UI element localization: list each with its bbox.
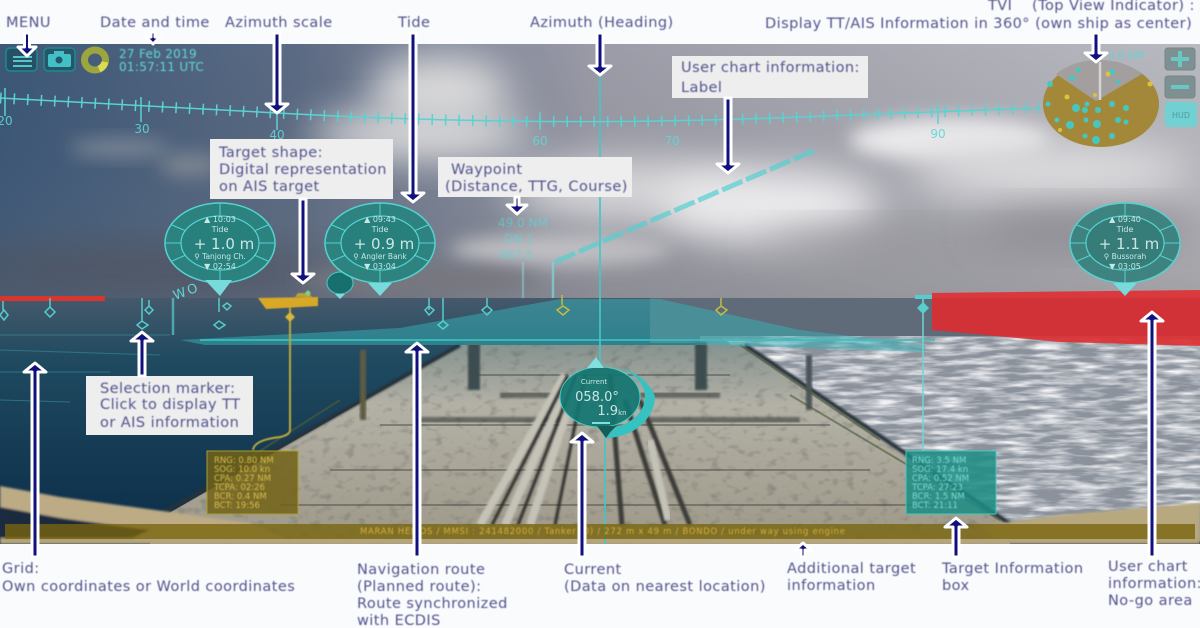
- tide gauge 1: ▼ 02:54: [204, 262, 236, 271]
- AIS target: yellow ship shape: [253, 290, 318, 450]
- text: additional target information: [787, 561, 916, 594]
- heading: azimuth heading: Azimuth (Heading): [530, 15, 674, 31]
- arrow: azimuth scale: [266, 33, 288, 113]
- heading: tide: Tide: [397, 15, 430, 31]
- scale numbers: 30: [134, 122, 150, 136]
- callout box: user chart label: Label: [681, 80, 722, 96]
- text: target information box: Target Information: [941, 561, 1084, 577]
- bridge window rails: [0, 486, 1200, 544]
- arrow: navigation route: [406, 343, 428, 557]
- teal target information box: BCR: 1.5 NM: [912, 492, 965, 502]
- world route label: WO: [171, 280, 202, 304]
- callout box: user chart label: [672, 56, 868, 98]
- sky with clouds: [0, 44, 1200, 300]
- current gauge: Current: [581, 378, 607, 386]
- text: current: (Data on nearest location): [564, 579, 766, 595]
- date and time readout: 01:57:11 UTC: [119, 60, 204, 74]
- text: user chart information no-go area: information:: [1108, 576, 1200, 592]
- gold target information box: CPA: 0.27 NM: [214, 474, 271, 484]
- arrow: menu: [18, 33, 36, 56]
- arrow: target shape: [292, 199, 314, 283]
- status donut icon: [84, 50, 106, 70]
- top view indicator (TVI): 3.0 NM: [1108, 50, 1145, 62]
- text: user chart information no-go area: No-go area: [1108, 593, 1193, 609]
- scale numbers: 40: [269, 128, 285, 142]
- callout box: selection marker: [86, 376, 253, 435]
- no-go area left: [0, 296, 105, 301]
- arrow: current: [571, 433, 593, 557]
- date and time readout: [119, 47, 204, 74]
- tide gauge 2: ▲ 09:43: [364, 215, 396, 224]
- text: target information box: box: [942, 578, 970, 594]
- route line to waypoint: [555, 150, 815, 262]
- waypoint readout: 49.0 NM: [498, 216, 548, 230]
- tide gauge 3: Tide: [1116, 225, 1134, 234]
- arrow: user chart label: [717, 98, 739, 173]
- tide gauge 3: ▲ 09:40: [1109, 215, 1141, 224]
- TVI HUD button: [1165, 102, 1197, 127]
- date and time readout: 27 Feb 2019: [119, 47, 197, 61]
- callout box: target shape: Digital representation: [219, 162, 387, 178]
- callout box: user chart label: User chart information:: [681, 60, 860, 76]
- gold target information box: TCPA: 02:26: [213, 483, 265, 493]
- horizontal own-ship line: [200, 339, 935, 341]
- callout box: selection marker: Selection marker:: [100, 381, 235, 397]
- teal target information box: RNG: 3.5 NM: [912, 456, 966, 466]
- gold target information box: BCT: 19:56: [214, 501, 260, 511]
- waypoint readout: [498, 216, 548, 298]
- additional target information bar: MARAN HELIOS / MMSI : 241482000 / Tanker (0) / 272 m x 49 m / BONDO / under way using engine: [360, 527, 845, 537]
- azimuth heading line: [600, 44, 605, 544]
- arrow: date and time: [146, 32, 160, 44]
- selection markers: [0, 295, 932, 451]
- heading: TVI: [765, 0, 1195, 32]
- gold target information box: RNG: 0.80 NM: [214, 456, 274, 466]
- sea, dark left and sunlit right: [0, 298, 1200, 544]
- teal target information box: CPA: 0.52 NM: [912, 474, 969, 484]
- arrow: TVI: [1085, 33, 1107, 62]
- TVI zoom plus button: [1165, 48, 1195, 70]
- text: current: [564, 562, 766, 595]
- callout box: waypoint: (Distance, TTG, Course): [445, 179, 628, 195]
- teal target information box: [906, 451, 996, 514]
- scale numbers: 90: [930, 127, 946, 141]
- photo: ship bridge view with sky, sea and deck: [0, 44, 1200, 545]
- planned route surface: [180, 299, 925, 352]
- menu button icon: [6, 48, 37, 71]
- current gauge: [560, 357, 655, 438]
- arrow: user chart no-go area: [1141, 312, 1163, 557]
- gold target information box: BCR: 0.4 NM: [214, 492, 267, 502]
- arrow: target information box: [945, 518, 967, 557]
- top view indicator (TVI): [1043, 50, 1159, 147]
- teal target information box: BCT: 21:11: [912, 501, 958, 511]
- callout box: target shape: Target shape:: [218, 145, 323, 161]
- arrow: additional target information: [795, 543, 811, 557]
- scale numbers: [0, 114, 946, 148]
- current gauge: 1.9kn: [597, 404, 627, 419]
- heading: MENU: MENU: [6, 15, 51, 31]
- tide gauge 3: + 1.1 m: [1099, 235, 1159, 253]
- teal target information box: SOG: 17.4 kn: [912, 465, 968, 475]
- arrow: grid: [24, 363, 46, 557]
- grid lines: [0, 335, 170, 402]
- callout box: target shape: on AIS target: [219, 179, 320, 195]
- gold target information box: SOG: 10.0 kn: [214, 465, 270, 475]
- teal target information box: TCPA: 27:23: [911, 483, 963, 493]
- callout box: selection marker: or AIS information: [100, 415, 239, 431]
- TVI HUD button: HUD: [1172, 111, 1190, 120]
- arrow: tide: [402, 33, 424, 202]
- tide gauge 1: + 1.0 m: [194, 235, 254, 253]
- tide gauge 2: + 0.9 m: [354, 235, 414, 253]
- no-go area red zones: [0, 290, 1200, 346]
- tide gauge 1: Tide: [211, 225, 229, 234]
- text: additional target information: information: [787, 578, 876, 594]
- text: user chart information no-go area: User chart: [1108, 559, 1188, 575]
- scale numbers: 70: [664, 134, 680, 148]
- tanker deck: [150, 340, 1010, 545]
- text: grid: [2, 561, 295, 595]
- waypoint readout: DN 1: [504, 232, 534, 246]
- tide gauge 1: [165, 203, 275, 296]
- text: grid: Grid:: [2, 561, 40, 577]
- tide gauge 2: Tide: [371, 225, 389, 234]
- callout box: selection marker: Click to display TT: [100, 397, 240, 413]
- heading: date and time: Date and time: [100, 15, 210, 31]
- camera button icon: [44, 48, 75, 71]
- tide gauge 3: [1070, 203, 1180, 296]
- text: grid: Own coordinates or World coordinates: [2, 579, 295, 595]
- text: navigation route: Navigation route: [357, 562, 485, 578]
- text: navigation route: [357, 562, 508, 628]
- arrow: azimuth heading: [589, 33, 611, 75]
- TVI zoom minus button: [1165, 76, 1195, 98]
- navigation route overlay: [0, 150, 935, 402]
- tide gauge 3: ⚲ Bussorah: [1104, 252, 1147, 261]
- gold target information box: [207, 451, 298, 514]
- route post: [552, 262, 554, 298]
- callout box: target shape: [210, 139, 393, 199]
- arrow: waypoint: [507, 197, 527, 214]
- tide gauge 2: [325, 203, 435, 296]
- heading: TVI: Display TT/AIS Information in 360° (own ship as center): [765, 16, 1192, 32]
- heading: azimuth scale: Azimuth scale: [225, 15, 333, 31]
- text: target information box: [941, 561, 1084, 594]
- arrow: selection marker: [131, 332, 153, 376]
- current gauge: 058.0°: [575, 390, 619, 405]
- waypoint readout: 067.5: [499, 248, 533, 262]
- small tide marker: [327, 272, 353, 299]
- text: current: Current: [564, 562, 622, 578]
- scale numbers: 60: [532, 134, 548, 148]
- no-go area right: [932, 290, 1200, 346]
- text: navigation route: (Planned route):: [357, 579, 481, 595]
- tide gauge 2: ▼ 03:04: [364, 262, 396, 271]
- callout box: waypoint: Waypoint: [451, 162, 522, 178]
- text: user chart information no-go area: [1108, 559, 1200, 609]
- callout box: waypoint: [438, 157, 632, 197]
- tide gauge 1: ▲ 10:03: [204, 215, 236, 224]
- azimuth scale: [0, 88, 1040, 148]
- text: navigation route: Route synchronized: [357, 596, 508, 612]
- additional target information bar: [5, 524, 1195, 539]
- tide gauge 3: ▼ 03:05: [1109, 262, 1141, 271]
- tide gauge 2: ⚲ Angler Bank: [353, 252, 407, 261]
- text: additional target information: Additional target: [787, 561, 916, 577]
- tide gauge 1: ⚲ Tanjong Ch.: [194, 252, 246, 261]
